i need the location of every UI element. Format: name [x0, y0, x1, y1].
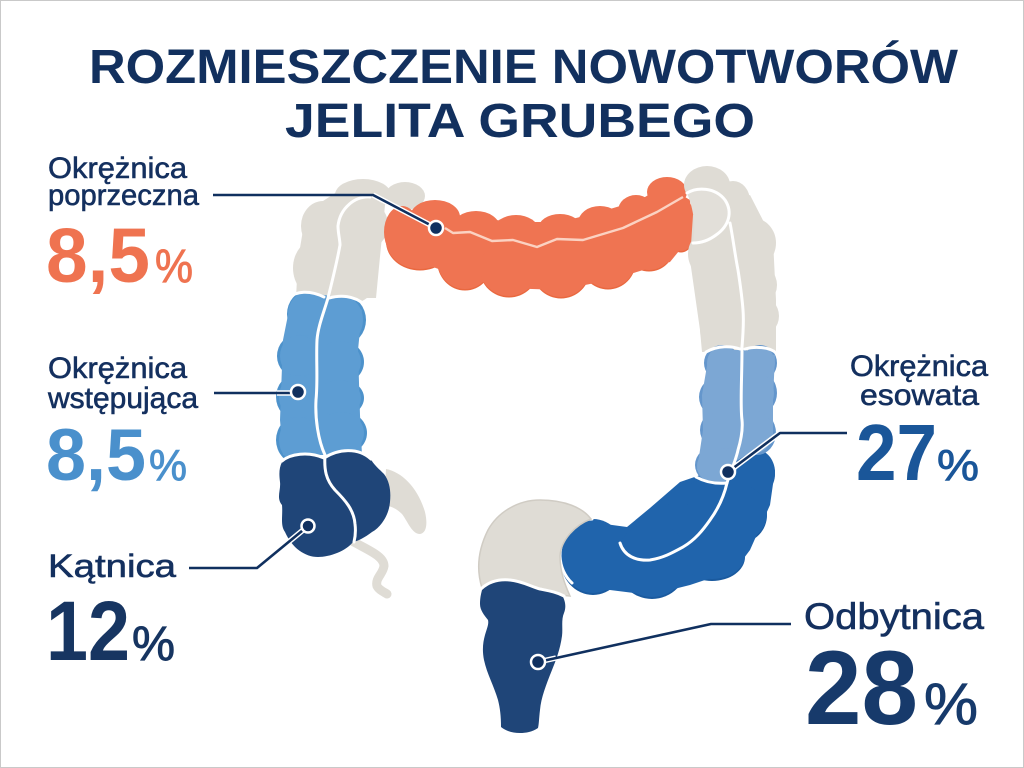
segment: transverse colon (orange) — [384, 177, 697, 298]
leader: ascending colon — [214, 385, 305, 399]
segment: ascending upper unaffected (grey) — [293, 179, 425, 303]
segment: descending upper unaffected (grey) — [684, 166, 779, 361]
label: Odbytnica 28% — [804, 596, 984, 747]
label: Okrężnica esowata 27%: 27 — [856, 408, 937, 497]
label: Odbytnica 28%: Odbytnica — [804, 596, 984, 637]
leader: rectum — [531, 624, 791, 669]
label: Okrężnica esowata 27%: Okrężnica — [850, 350, 988, 383]
label: Kątnica 12%: Kątnica — [48, 548, 176, 584]
segment: cecum (navy) — [279, 450, 390, 557]
label: Okrężnica poprzeczna 8,5%: poprzeczna — [48, 179, 199, 212]
rectum upper unaffected (grey) — [479, 500, 591, 596]
segment: ascending colon (mid blue) — [276, 291, 367, 464]
label: Okrężnica wstępująca 8,5%: wstępująca — [47, 382, 198, 415]
label: Kątnica 12% — [46, 548, 176, 678]
segment: rectum (navy) — [480, 581, 565, 733]
label: Okrężnica esowata 27%: esowata — [860, 379, 979, 412]
title: JELITA GRUBEGO — [285, 95, 755, 148]
label: Okrężnica wstępująca 8,5%: Okrężnica — [48, 352, 187, 385]
segment: descending lower (light blue) — [695, 345, 777, 484]
label: Okrężnica poprzeczna 8,5% — [46, 152, 199, 299]
label: Okrężnica wstępująca 8,5%: % — [149, 441, 187, 490]
title: ROZMIESZCZENIE NOWOTWORÓW — [89, 39, 959, 94]
label: Odbytnica 28%: 28 — [805, 630, 918, 747]
leader: transverse colon — [213, 195, 443, 235]
colon illustration — [276, 166, 779, 733]
leader: sigmoid colon — [721, 433, 847, 479]
title — [89, 39, 959, 148]
label: Okrężnica esowata 27%: % — [937, 441, 979, 490]
label: Okrężnica poprzeczna 8,5%: 8,5 — [46, 213, 150, 299]
label: Okrężnica poprzeczna 8,5%: % — [155, 239, 193, 292]
label: Odbytnica 28%: % — [924, 672, 978, 737]
colon midline ascending (white) — [316, 197, 370, 542]
label: Okrężnica wstępująca 8,5%: 8,5 — [46, 415, 146, 496]
segment: sigmoid colon (dark blue) — [560, 448, 775, 599]
label: Okrężnica wstępująca 8,5% — [46, 352, 198, 496]
colon midline (white) — [620, 223, 743, 560]
label: Kątnica 12%: % — [132, 618, 175, 671]
label: Okrężnica poprzeczna 8,5%: Okrężnica — [48, 152, 187, 185]
label: Okrężnica esowata 27% — [850, 350, 988, 497]
label: Kątnica 12%: 12 — [46, 584, 130, 678]
leader: cecum — [189, 520, 314, 568]
appendix — [352, 469, 426, 594]
